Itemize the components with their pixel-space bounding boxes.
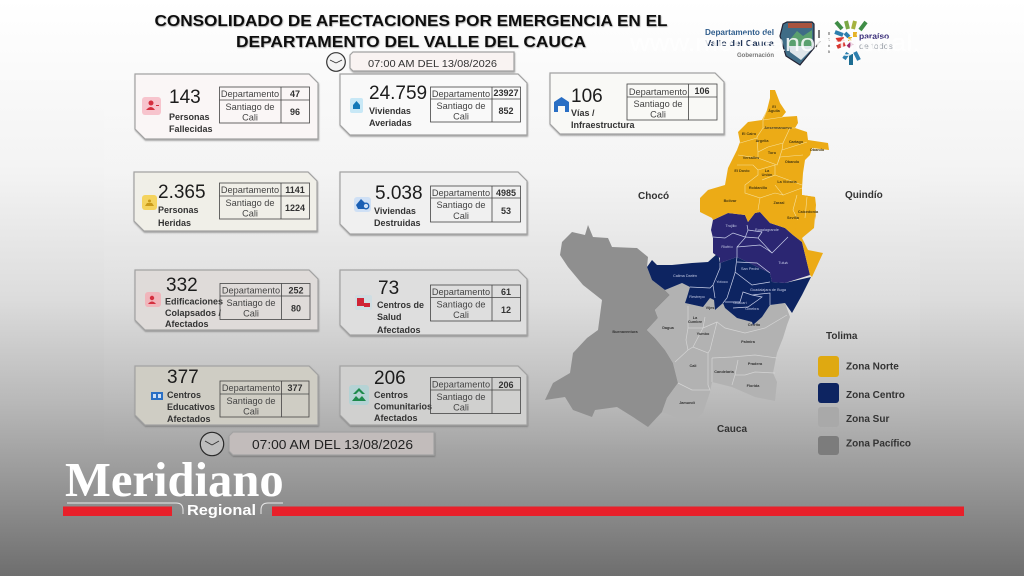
table: Cali — [453, 211, 469, 221]
zone: Norte: Ansermanuevo — [764, 126, 792, 130]
card: Viviendas Averiadas: Viviendas — [369, 106, 411, 116]
icon: educativos — [151, 392, 163, 400]
card: Personas Fallecidas: Personas — [169, 112, 210, 122]
icon: comunitarios — [349, 385, 369, 405]
logo: Paraíso de todos: de todos — [859, 42, 893, 51]
zone: Norte: El Dovio — [734, 169, 750, 173]
zone: Norte — [700, 90, 829, 277]
card: Centros Educativos: Educativos — [167, 402, 215, 412]
card: Edificaciones Colapsados: Afectados — [165, 319, 209, 329]
table: 23927 — [493, 88, 519, 98]
zone: Norte: La — [765, 169, 770, 173]
card: Centros Comunitarios: 206 — [374, 368, 406, 389]
table: Cali — [243, 308, 259, 318]
logo: Departamento del Valle del Cauca — [705, 22, 829, 65]
icon: persona fallecida — [142, 97, 161, 115]
table: 1141 — [285, 185, 305, 195]
legend — [818, 356, 911, 455]
card: Viviendas Averiadas: 24.759 — [369, 83, 427, 104]
zone: Pacifico — [545, 225, 678, 427]
zone: Sur: Cali — [690, 364, 696, 368]
card: Viviendas Destruidas: Viviendas — [374, 206, 416, 216]
title — [154, 13, 668, 51]
zone: Sur: Florida — [747, 384, 760, 388]
card: Personas Heridas: Personas — [158, 205, 199, 215]
red bar left — [63, 506, 172, 516]
table: Departamento — [432, 380, 490, 390]
table: 47 — [290, 89, 300, 99]
card: Centros Comunitarios: Comunitarios — [374, 402, 432, 412]
table: Santiago de — [436, 200, 486, 210]
zone: Norte: Unión — [762, 173, 773, 177]
zone: Centro: Trujillo — [725, 224, 737, 228]
zone: Sur: Cumbre — [688, 320, 702, 324]
card: Centros Comunitarios: Afectados — [374, 413, 418, 423]
central infographic panel — [104, 0, 920, 460]
icon: salud — [355, 295, 372, 310]
zone: Centro: Riofrío — [721, 245, 733, 249]
card: Centros Educativos: Afectados — [167, 414, 211, 424]
table: Santiago de — [226, 298, 276, 308]
card: Centros de Salud: 73 — [378, 278, 399, 299]
zone: Norte: El Cairo — [742, 132, 757, 136]
table: Departamento — [432, 287, 490, 297]
table: Santiago de — [225, 102, 275, 112]
zone: Centro: Bugalagrande — [755, 228, 779, 232]
card: Edificaciones Colapsados — [135, 270, 318, 330]
zone: Sur: Palmira — [741, 340, 756, 344]
card: Vias / Infraestructura: Infraestructura — [571, 120, 636, 130]
table: Departamento — [221, 89, 279, 99]
neighbouring department labels: Quindío — [845, 190, 883, 201]
top clock and timestamp — [327, 52, 514, 71]
logo: Departamento del Valle del Cauca: Gobernación — [737, 53, 774, 59]
zone: Norte: La Victoria — [777, 180, 798, 184]
card: Vias / Infraestructura: Vías / — [571, 108, 595, 118]
zone: Sur: Vijes — [706, 306, 714, 310]
table: Cali — [453, 402, 469, 412]
card: Personas Heridas: 2.365 — [158, 182, 206, 203]
table: 96 — [290, 107, 300, 117]
icon: vias — [554, 97, 569, 112]
table — [220, 183, 310, 219]
legend: Zona Centro — [846, 390, 905, 401]
card: Personas Fallecidas — [135, 74, 318, 139]
card: Centros de Salud — [340, 270, 527, 335]
zone: Centro: Yotoco — [716, 280, 728, 284]
table: Santiago de — [633, 99, 683, 109]
table: 852 — [498, 106, 514, 116]
legend: Zona Sur — [846, 414, 889, 425]
zone: Centro — [647, 212, 811, 325]
red bar right — [272, 506, 964, 516]
table: 53 — [501, 206, 511, 216]
zone: Centro: Calima Darién — [673, 274, 697, 278]
legend: Zona Pacífico — [846, 438, 911, 450]
zone: Centro: Tuluá — [778, 261, 789, 265]
table — [430, 87, 520, 122]
neighbouring department labels: Chocó — [638, 191, 669, 202]
zone: Norte: Sevilla — [787, 216, 800, 220]
card: Personas Fallecidas: 143 — [169, 87, 201, 108]
card: Centros de Salud: Salud — [377, 312, 402, 322]
brand logo: Meridiano Regional: Regional — [187, 503, 256, 519]
table: Cali — [453, 310, 469, 320]
icon: vivienda averiada — [350, 98, 363, 113]
zone: Sur: Dagua — [662, 326, 675, 330]
card: Personas Heridas: Heridas — [158, 218, 191, 228]
icon: shield — [780, 22, 829, 65]
table: Santiago de — [436, 101, 486, 111]
map of Valle del Cauca — [545, 90, 829, 427]
logo: Departamento del Valle del Cauca: Departamento del — [705, 28, 774, 37]
zone: Sur: Pradera — [748, 362, 763, 366]
table — [627, 84, 717, 120]
zone: Sur — [647, 283, 790, 422]
table: Departamento — [222, 286, 280, 296]
zone: Norte: Obando — [810, 148, 825, 152]
card: Viviendas Averiadas — [340, 74, 527, 135]
table: 377 — [287, 383, 303, 393]
table — [220, 284, 310, 320]
zone: Norte: Versalles — [743, 156, 759, 160]
card: Centros de Salud: Centros de — [377, 300, 424, 310]
card: Centros Educativos: Centros — [167, 390, 201, 400]
icon: edificaciones — [145, 292, 161, 307]
zone: Pacifico: Buenaventura — [612, 330, 639, 334]
zone: Sur: La — [693, 316, 698, 320]
title: DEPARTAMENTO DEL VALLE DEL CAUCA — [236, 34, 586, 51]
zone: Norte: El — [772, 105, 776, 109]
zone: Norte: Toro — [768, 151, 777, 155]
zone: Centro: San Pedro — [741, 267, 759, 271]
zone: Centro: Guacarí — [733, 301, 748, 305]
table: 80 — [291, 304, 301, 314]
card: Vias / Infraestructura — [550, 73, 724, 134]
brand logo: Meridiano Regional: Meridiano — [65, 453, 284, 507]
zone: Sur: Yumbo — [697, 332, 710, 336]
card: Centros Comunitarios — [340, 366, 527, 425]
card: Personas Heridas — [134, 172, 317, 231]
card: Vias / Infraestructura: 106 — [571, 86, 603, 107]
zone: Sur: Jamundí — [679, 401, 696, 405]
table: Departamento — [629, 87, 687, 97]
zone: Norte: Cartago — [789, 140, 804, 144]
zone: Centro: Restrepo — [689, 295, 705, 299]
zone: Centro: Ginebra — [745, 307, 760, 311]
neighbouring department labels: Cauca — [717, 424, 747, 435]
table: Departamento — [432, 89, 490, 99]
zone: Norte: Zarzal — [774, 201, 784, 205]
logo: Paraíso de todos — [835, 21, 893, 65]
table: Cali — [650, 110, 666, 120]
zone: Norte: Obando — [785, 160, 800, 164]
top clock and timestamp: 07:00 AM DEL 13/08/2026 — [368, 58, 497, 70]
logo: Departamento del Valle del Cauca: Valle del Cauca — [705, 38, 774, 48]
table: 1224 — [285, 203, 305, 213]
zone: Norte: Argelia — [756, 139, 769, 143]
table: 12 — [501, 305, 511, 315]
table: Santiago de — [436, 300, 486, 310]
card: Centros Educativos: 377 — [167, 367, 199, 388]
zone: Norte: Roldanillo — [749, 186, 768, 190]
bottom clock and timestamp — [200, 432, 434, 456]
table: Santiago de — [436, 392, 486, 402]
table — [430, 285, 520, 321]
watermark url: www.meridianoregional. — [629, 30, 920, 57]
card: Viviendas Destruidas: 5.038 — [375, 183, 423, 204]
table: 4985 — [496, 188, 516, 198]
table — [430, 378, 520, 414]
card: Viviendas Destruidas — [340, 172, 527, 234]
table — [430, 186, 520, 222]
table: Departamento — [222, 383, 280, 393]
table: Santiago de — [226, 396, 276, 406]
table: Cali — [453, 112, 469, 122]
neighbouring department labels: Tolima — [826, 331, 858, 342]
icon: vivienda destruida — [354, 197, 371, 212]
table: 252 — [288, 286, 304, 296]
zone: Norte: Águila — [768, 108, 781, 113]
neighbouring department labels — [638, 190, 883, 435]
card: Edificaciones Colapsados: Colapsados / — [165, 308, 222, 318]
zone: Sur: Cerrito — [748, 323, 761, 327]
table: Departamento — [432, 188, 490, 198]
legend: Zona Norte — [846, 362, 899, 372]
table: 206 — [498, 380, 514, 390]
table: 61 — [501, 287, 511, 297]
zone: Sur: Candelaria — [714, 370, 735, 374]
card: Centros Comunitarios: Centros — [374, 390, 408, 400]
card: Edificaciones Colapsados: 332 — [166, 275, 198, 296]
table: Cali — [242, 208, 258, 218]
card: Centros de Salud: Afectados — [377, 325, 421, 335]
table — [220, 87, 310, 123]
table — [220, 381, 309, 417]
logo: Paraíso de todos: paraíso — [859, 31, 889, 41]
table: 106 — [694, 86, 710, 96]
title: CONSOLIDADO DE AFECTACIONES POR EMERGENCIA EN EL — [154, 13, 668, 30]
card: Viviendas Averiadas: Averiadas — [369, 118, 412, 128]
zone: Norte: Caicedonia — [798, 210, 819, 214]
bottom clock and timestamp: 07:00 AM DEL 13/08/2026 — [252, 437, 413, 452]
icon: persona herida — [142, 195, 157, 210]
zone: Norte: Bolívar — [724, 199, 737, 203]
zone: Centro: Guadalajara de Buga — [750, 288, 787, 292]
card: Viviendas Destruidas: Destruidas — [374, 218, 421, 228]
table: Departamento — [221, 185, 279, 195]
card: Personas Fallecidas: Fallecidas — [169, 124, 213, 134]
table: Cali — [242, 112, 258, 122]
table: Cali — [243, 406, 259, 416]
table: Santiago de — [225, 198, 275, 208]
card: Edificaciones Colapsados: Edificaciones — [165, 296, 223, 306]
card: Centros Educativos — [135, 366, 318, 425]
